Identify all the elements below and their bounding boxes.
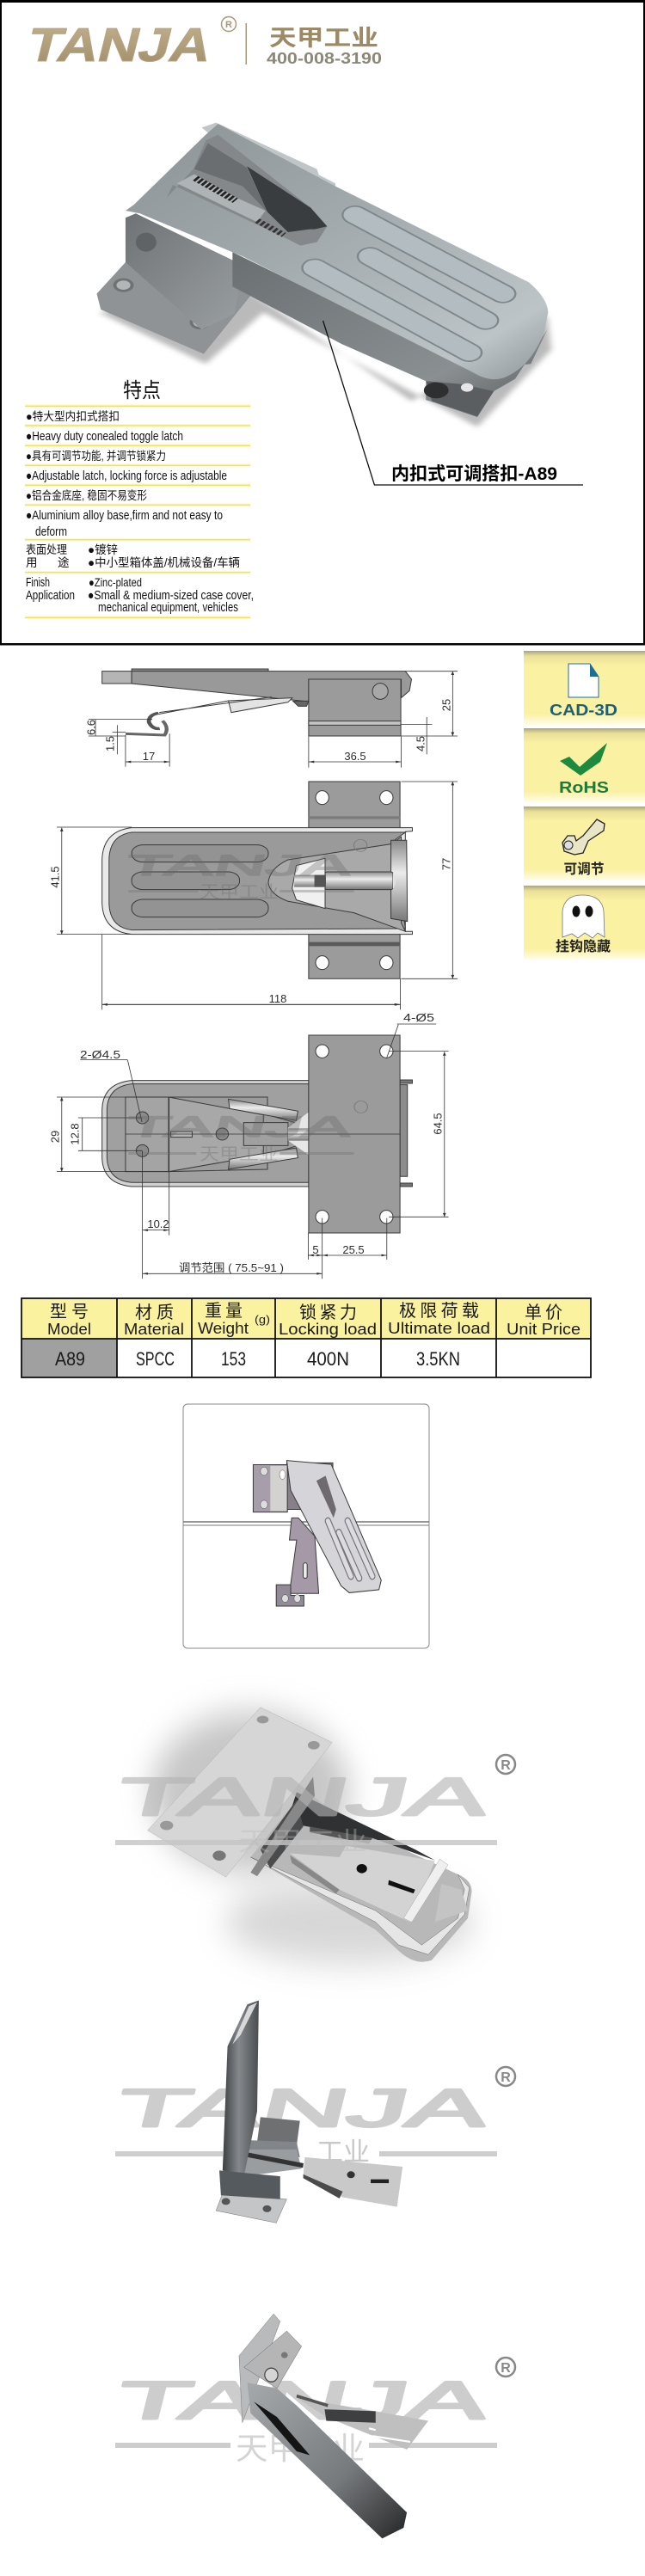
panel: feature list: ●具有可调节功能, 并调节锁紧力 — [26, 450, 166, 463]
table: specifications: 锁紧力 — [299, 1303, 357, 1322]
table: specifications: 型号 — [50, 1302, 89, 1322]
logo: TANJA brand: TANJA — [22, 18, 218, 71]
panel: feature list: ●特大型内扣式搭扣 — [26, 410, 120, 423]
chart: top view drawing — [102, 782, 412, 978]
table: specifications: (g) — [255, 1313, 270, 1326]
dimension labels: 2-Ø4.5 — [80, 1048, 120, 1061]
heading: features: 特点 — [123, 379, 161, 402]
table: specifications: Model — [47, 1320, 91, 1338]
panel: feature list: ●中小型箱体盖/机械设备/车辆 — [88, 555, 240, 569]
watermark: drawing underside view: TANJA — [122, 1111, 355, 1144]
icon panel: CAD-3D: CAD-3D — [550, 702, 617, 719]
table: specifications: Unit Price — [507, 1320, 580, 1338]
table: specifications: 3.5KN — [416, 1348, 460, 1370]
dimension labels: 6.6 — [85, 720, 98, 735]
icon panel: RoHS — [524, 728, 645, 802]
table: specifications: Weight — [198, 1319, 249, 1337]
panel: feature list: 用 — [26, 556, 38, 569]
panel: feature list: ●镀锌 — [88, 543, 118, 556]
dimension labels: 17 — [143, 750, 155, 763]
table: specifications: Locking load — [279, 1320, 377, 1338]
panel: feature list: deform — [35, 525, 67, 539]
table: specifications: Material — [124, 1320, 184, 1338]
panel: feature list: ●铝合金底座, 稳固不易变形 — [26, 489, 147, 502]
dimension labels: 29 — [49, 1131, 62, 1143]
watermark: drawing underside view: 天甲工业 — [200, 1144, 279, 1164]
table: specifications — [22, 1298, 591, 1377]
image: open latch photo with watermark: R — [501, 1758, 511, 1773]
table: specifications: 重量 — [205, 1301, 243, 1321]
chart: underside view drawing — [57, 1004, 449, 1279]
watermark: drawing underside view — [122, 1111, 355, 1164]
panel: product hero frame — [0, 0, 645, 645]
panel: feature list: ●Heavy duty conealed toggle latch — [26, 430, 183, 444]
table: specifications: 极限荷载 — [399, 1301, 479, 1321]
dimension labels: 调节范围 ( 75.5~91 ) — [179, 1261, 284, 1274]
image: side open latch photo with watermark: R — [501, 2070, 511, 2085]
panel: feature list: Application — [26, 589, 75, 603]
panel: feature list: Finish — [26, 576, 50, 590]
panel: feature list: ●Adjustable latch, locking force is adjustable — [26, 469, 227, 483]
table: specifications: A89 — [55, 1348, 85, 1370]
panel: feature list: 表面处理 — [26, 543, 67, 556]
table: specifications: 材质 — [135, 1303, 174, 1322]
image: angled latch photo with watermark: TANJA — [111, 2371, 495, 2431]
dimension labels: 4.5 — [415, 736, 427, 751]
table: specifications: 单价 — [525, 1303, 562, 1322]
dimension labels: 4-Ø5 — [403, 1011, 434, 1024]
image: angled latch photo with watermark: 天甲工业 — [236, 2431, 365, 2466]
dimension labels: 41.5 — [49, 866, 62, 888]
image: side open latch photo with watermark: TANJA — [111, 2079, 495, 2138]
image: open latch photo with watermark — [111, 1708, 515, 1964]
table: specifications: Ultimate load — [388, 1319, 490, 1337]
dimension labels: 12.8 — [69, 1123, 82, 1145]
dimension labels: 77 — [440, 858, 453, 870]
icon panel: RoHS: RoHS — [559, 779, 609, 796]
dimension labels: 25.5 — [342, 1243, 365, 1256]
image: side open latch photo with watermark — [111, 2001, 515, 2223]
panel: feature list: mechanical equipment, vehicles — [98, 601, 238, 615]
dimension labels: 36.5 — [344, 750, 366, 763]
panel: feature list: ●Zinc-plated — [89, 576, 142, 589]
logo: TANJA brand — [22, 17, 382, 71]
callout: model label with leader line — [323, 321, 583, 485]
dimension labels: 25 — [440, 699, 453, 711]
image: angled latch photo with watermark — [111, 2314, 515, 2538]
icon panel: adjustable wrench: 可调节 — [564, 862, 604, 877]
panel: feature list: ●Small & medium-sized case cover, — [88, 589, 254, 603]
image: open latch photo with watermark: 天甲工业 — [238, 1828, 367, 1856]
dimension labels: 1.5 — [104, 736, 117, 751]
panel: installation diagram card — [183, 1404, 429, 1648]
watermark: drawing top view — [122, 849, 355, 902]
icon panel: hidden hook ghost: 挂钩隐藏 — [556, 938, 611, 954]
logo: TANJA brand: 天甲工业 — [269, 25, 378, 51]
image: main latch photo — [96, 123, 551, 427]
table: specifications: 400N — [307, 1348, 349, 1370]
dimension labels: 10.2 — [147, 1217, 169, 1230]
image: open latch photo with watermark: TANJA — [111, 1768, 495, 1827]
dimension labels — [49, 699, 453, 1274]
table: specifications: SPCC — [136, 1348, 175, 1370]
panel: feature list: ●Aluminium alloy base,firm and not easy to — [26, 509, 223, 523]
dimension labels: 64.5 — [432, 1113, 445, 1135]
dimension labels: 5 — [312, 1243, 319, 1256]
watermark: drawing top view: TANJA — [122, 849, 355, 882]
image: angled latch photo with watermark: R — [501, 2361, 511, 2376]
icon panel: hidden hook ghost — [524, 886, 645, 960]
icon panel: adjustable wrench — [524, 807, 645, 880]
dimension labels: 118 — [269, 992, 286, 1005]
watermark: drawing top view: 天甲工业 — [200, 882, 279, 902]
logo: TANJA brand: 400-008-3190 — [267, 50, 382, 67]
image: side open latch photo with watermark: 工业 — [316, 2138, 370, 2167]
logo: TANJA brand: R — [225, 20, 232, 30]
panel: feature list: 途 — [58, 555, 70, 569]
panel: feature list — [25, 406, 254, 617]
chart: side view drawing — [89, 669, 458, 768]
table: specifications: 153 — [221, 1348, 246, 1370]
chart: top view dimensions — [57, 782, 458, 1009]
icon panel: CAD-3D — [524, 651, 645, 725]
callout: model label with leader line: 内扣式可调搭扣-A89 — [391, 464, 557, 484]
